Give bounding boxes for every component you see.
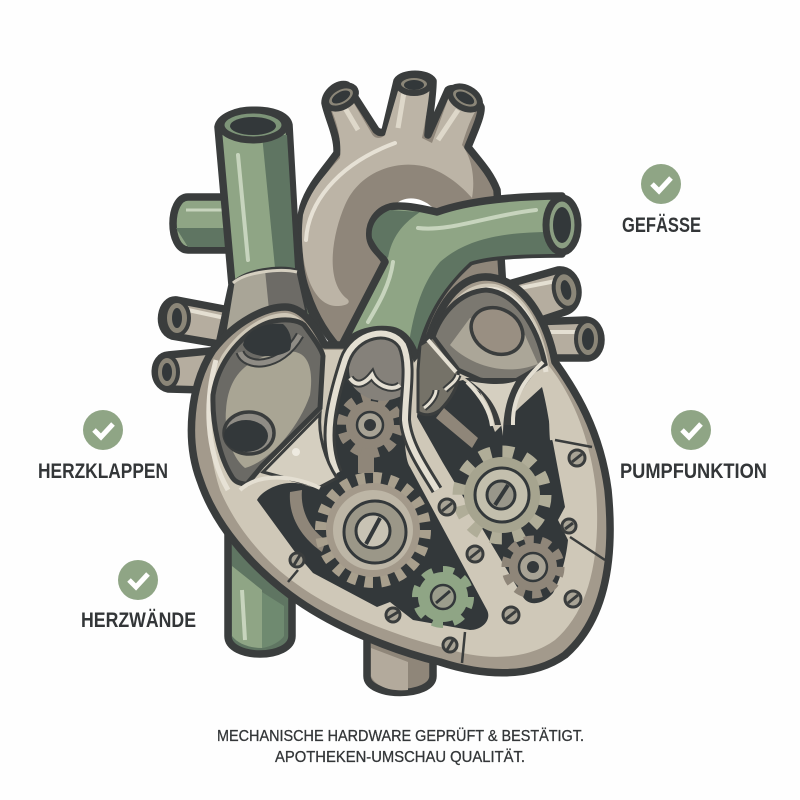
footer caption: MECHANISCHE HARDWARE GEPRÜFT & BESTÄTIGT. bbox=[217, 727, 584, 745]
rivet bbox=[439, 499, 455, 515]
rivet bbox=[467, 546, 483, 562]
central arch valve frame bbox=[329, 334, 437, 490]
footer caption bbox=[217, 727, 584, 766]
pulmonary artery bbox=[342, 196, 578, 350]
label: Herzklappen: HERZKLAPPEN bbox=[38, 460, 168, 483]
label: Herzwände bbox=[81, 560, 196, 632]
left lower tan pipe bbox=[155, 350, 220, 390]
heart illustration bbox=[155, 74, 610, 692]
left ventricle cavity bbox=[257, 336, 488, 630]
rivet bbox=[562, 519, 576, 533]
label: Pumpfunktion bbox=[620, 410, 767, 483]
left upper tan pipe bbox=[161, 300, 240, 345]
left green vein stub bbox=[173, 197, 236, 250]
lower aorta stub bbox=[367, 620, 433, 692]
label: Gefässe: GEFÄSSE bbox=[622, 214, 701, 237]
right upper tan pipe bbox=[505, 270, 581, 327]
right large gear bbox=[460, 453, 544, 537]
left triangular wall bbox=[240, 414, 337, 490]
wall seams bbox=[288, 440, 605, 663]
rivet bbox=[386, 608, 400, 622]
lower vena cava pipe bbox=[228, 520, 292, 654]
rivet bbox=[503, 607, 519, 623]
label: Gefässe bbox=[622, 164, 701, 237]
rivet bbox=[443, 638, 457, 652]
large central gear bbox=[322, 479, 424, 581]
right lower tan pipe bbox=[530, 320, 601, 358]
rivet bbox=[290, 553, 304, 567]
label: Herzwände: HERZWÄNDE bbox=[81, 609, 196, 632]
lower right gear bbox=[507, 541, 559, 593]
rivet bbox=[565, 591, 581, 607]
label: Herzklappen bbox=[38, 410, 168, 483]
rivets bbox=[290, 450, 585, 652]
heart body outer wall bbox=[191, 277, 610, 673]
green gear bbox=[418, 572, 468, 622]
right atrium chamber bbox=[433, 290, 545, 383]
superior vena cava bbox=[218, 110, 318, 340]
left atrium chamber bbox=[213, 320, 323, 484]
label: Pumpfunktion: PUMPFUNKTION bbox=[620, 460, 767, 483]
tan connecting arm left bbox=[290, 490, 326, 552]
right ventricle cavity bbox=[417, 380, 568, 603]
right valve chamber bbox=[418, 337, 458, 415]
aorta arch bbox=[299, 74, 503, 360]
Y junction strut bbox=[465, 362, 552, 440]
tan shaft to right gear bbox=[436, 408, 478, 448]
rivet bbox=[569, 450, 585, 466]
footer caption: APOTHEKEN-UMSCHAU QUALITÄT. bbox=[275, 749, 525, 766]
small upper gear bbox=[343, 398, 397, 473]
